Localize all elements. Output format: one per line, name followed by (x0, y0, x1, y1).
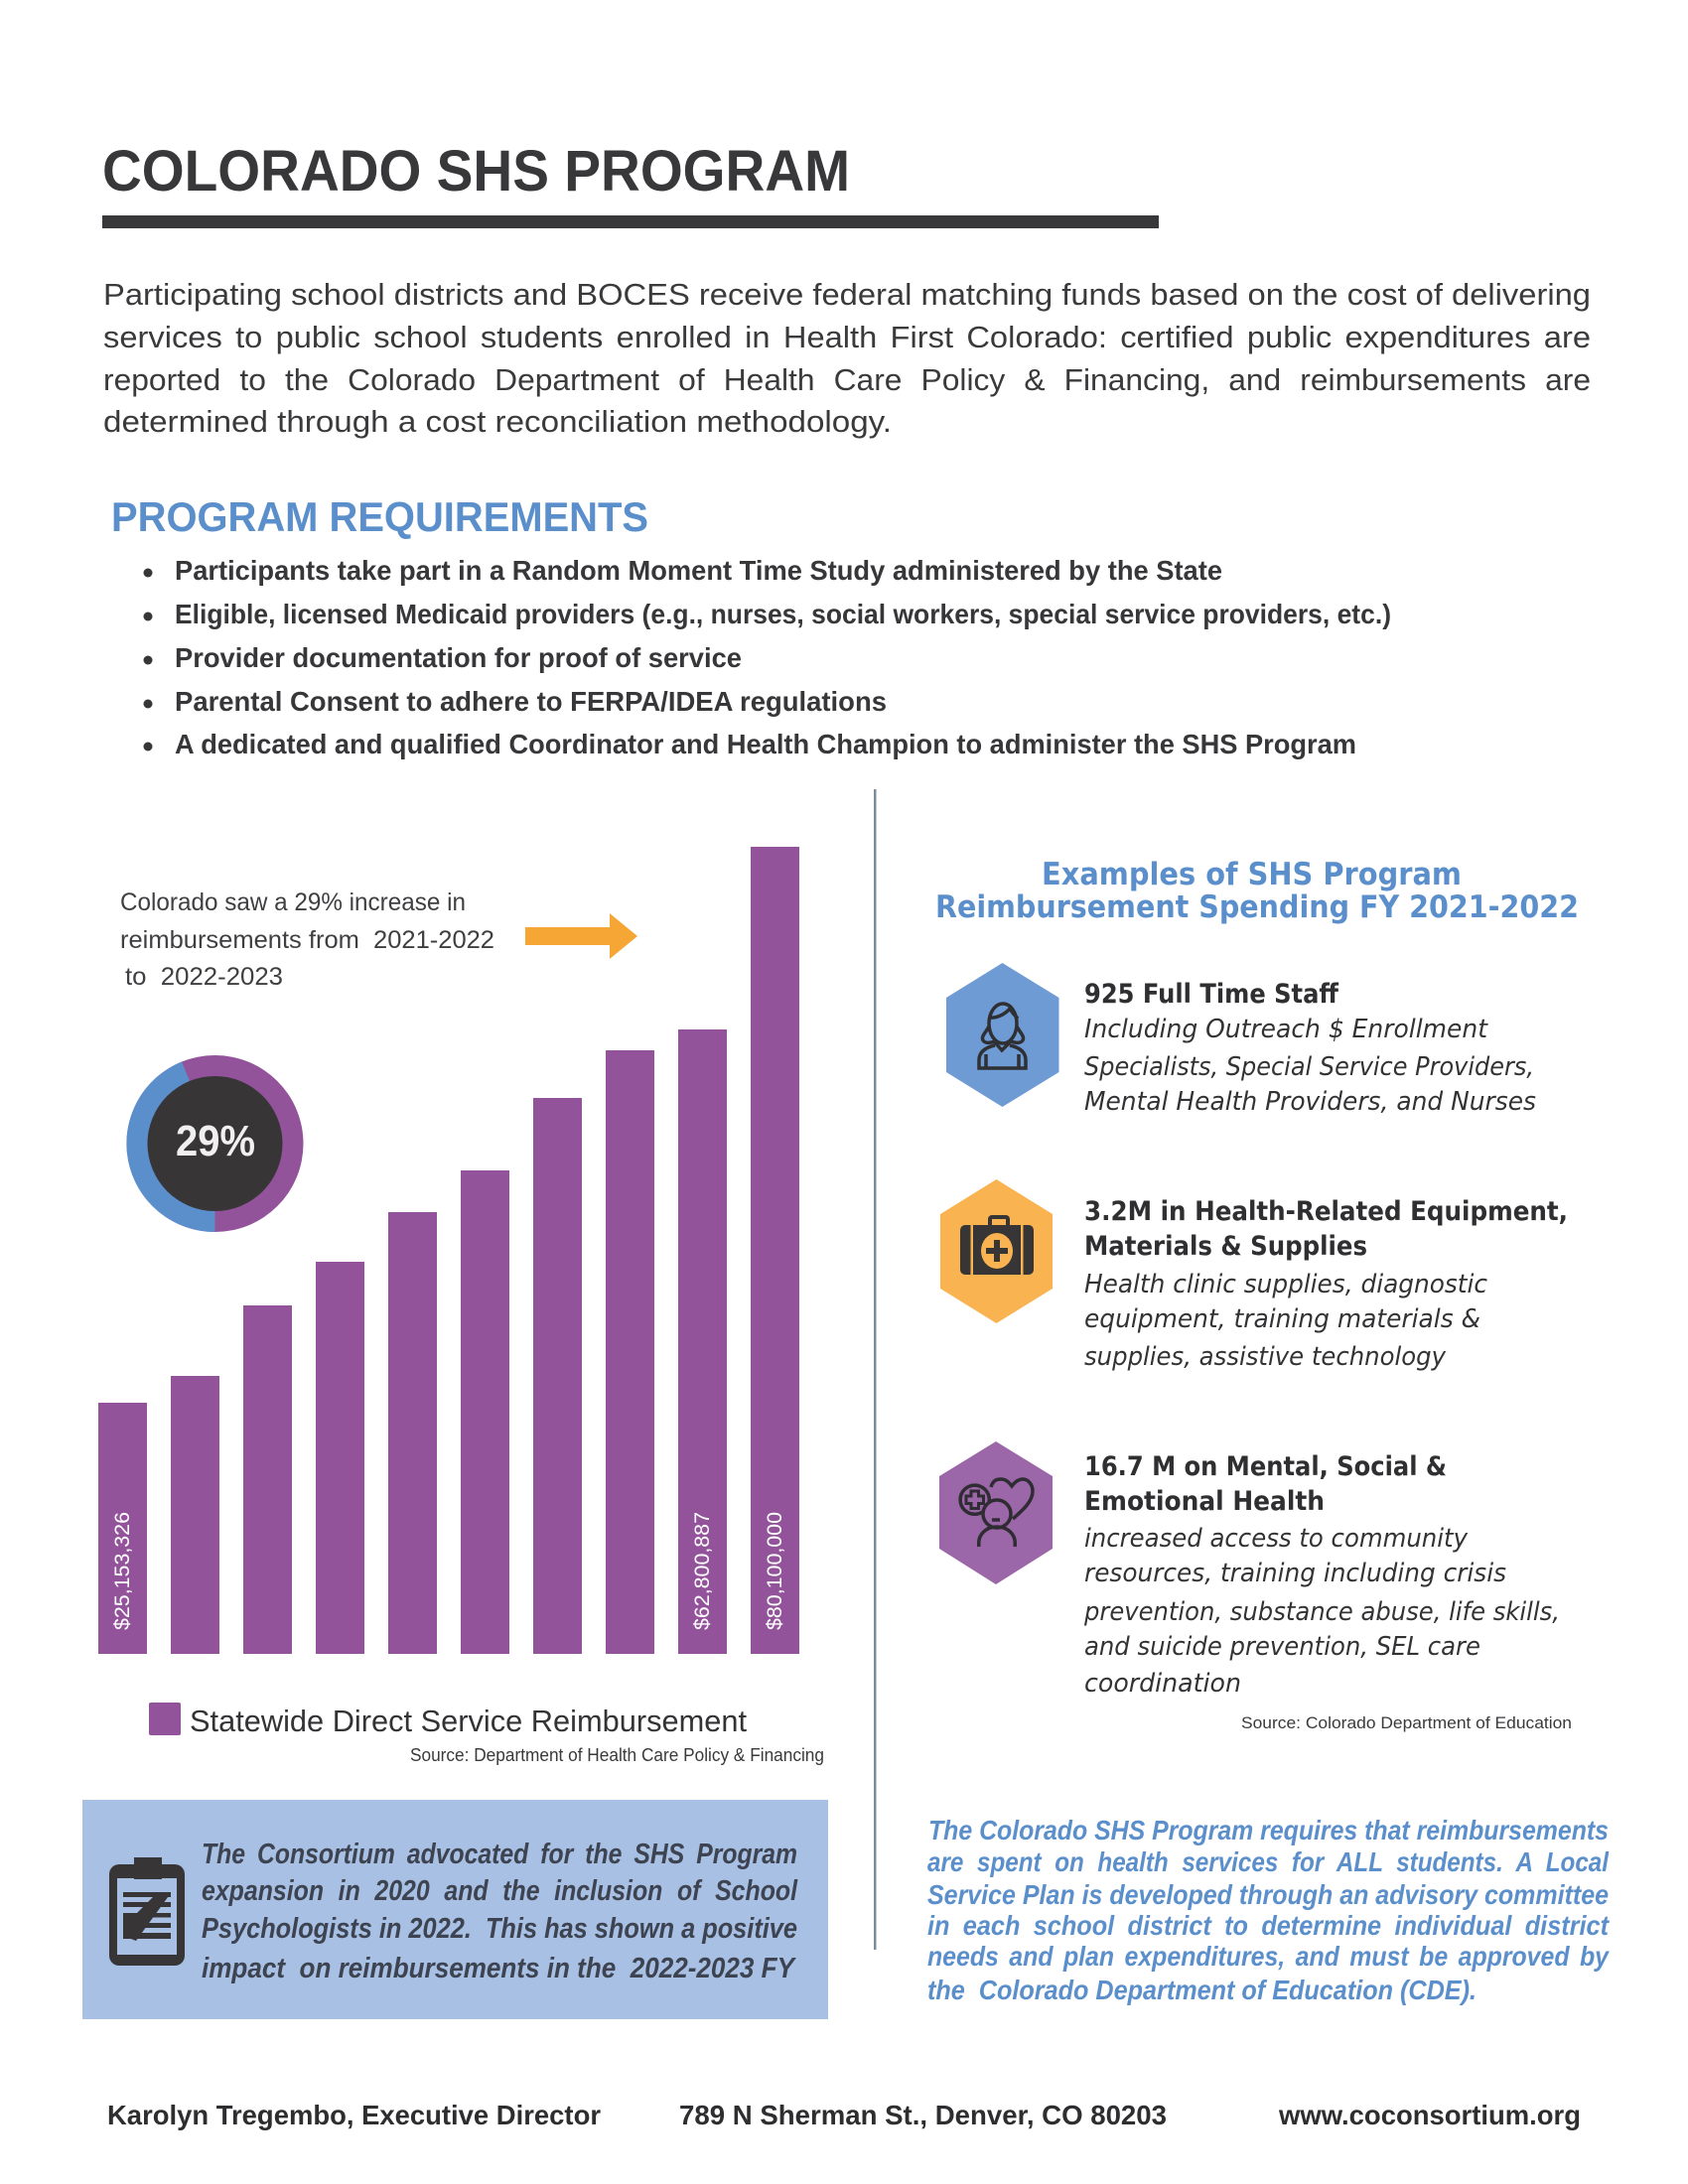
item: mental health text: Emotional Health (1084, 1486, 1325, 1517)
item: equipment text: equipment, training materials & (1084, 1304, 1480, 1334)
item: staff text (1084, 979, 1536, 1117)
item: staff text: Mental Health Providers, and Nurses (1084, 1087, 1536, 1117)
item: mental health text: increased access to community (1084, 1524, 1469, 1554)
local service plan note: The Colorado SHS Program requires that reimbursements (928, 1815, 1609, 1845)
advocacy text: Psychologists in 2022. This has shown a positive (202, 1913, 797, 1945)
advocacy text: impact on reimbursements in the 2022-2023 FY (202, 1953, 796, 1984)
donut chart: 29% (126, 1055, 304, 1232)
item: equipment text (1084, 1196, 1568, 1372)
heading: examples of spending: Reimbursement Spending FY 2021-2022 (935, 889, 1579, 925)
footer: www.coconsortium.org (1278, 2100, 1581, 2130)
bar value labels (111, 1512, 786, 1630)
spending source: Source: Colorado Department of Education (1241, 1713, 1572, 1732)
bar chart (98, 847, 799, 1654)
advocacy text: expansion in 2020 and the inclusion of School (202, 1875, 798, 1907)
local service plan note: needs and plan expenditures, and must be approved by (927, 1941, 1610, 1972)
item: mental health text (1083, 1451, 1560, 1699)
intro paragraph: Participating school districts and BOCES receive federal matching funds based on the cost of delivering (103, 277, 1591, 312)
item: equipment text: 3.2M in Health-Related Equipment, (1084, 1196, 1568, 1227)
callout: 29% increase text: to 2022-2023 (125, 963, 283, 991)
item: equipment text: Health clinic supplies, diagnostic (1084, 1270, 1487, 1299)
icon: mental health hexagon (939, 1441, 1053, 1584)
callout: 29% increase text: reimbursements from 2021-2022 (120, 926, 494, 954)
local service plan note: Service Plan is developed through an advisory committee (927, 1879, 1609, 1910)
donut chart: 29%: 29% (176, 1117, 255, 1165)
title: COLORADO SHS PROGRAM (102, 139, 850, 204)
requirements list (143, 555, 1391, 759)
requirements list: Provider documentation for proof of service (175, 642, 742, 673)
requirements list: A dedicated and qualified Coordinator and Health Champion to administer the SHS Program (175, 729, 1356, 759)
item: mental health text: 16.7 M on Mental, Social & (1084, 1451, 1447, 1482)
icon: staff hexagon (946, 963, 1058, 1107)
callout: 29% increase text: Colorado saw a 29% increase in (120, 888, 466, 916)
local service plan note: the Colorado Department of Education (CDE). (927, 1975, 1477, 2005)
arrow (525, 913, 637, 959)
intro paragraph: services to public school students enrolled in Health First Colorado: certified public expenditures are (103, 320, 1591, 354)
heading: program requirements: PROGRAM REQUIREMENTS (111, 493, 648, 540)
advocacy text: The Consortium advocated for the SHS Program (202, 1839, 797, 1870)
footer: Karolyn Tregembo, Executive Director (107, 2100, 601, 2130)
item: equipment text: Materials & Supplies (1084, 1231, 1367, 1262)
item: mental health text: prevention, substance abuse, life skills, (1083, 1597, 1560, 1627)
item: staff text: Including Outreach $ Enrollment (1084, 1015, 1488, 1044)
requirements list: Eligible, licensed Medicaid providers (e.g., nurses, social workers, special service providers, etc.) (175, 599, 1391, 629)
heading: examples of spending (935, 857, 1579, 925)
heading: examples of spending: Examples of SHS Program (1042, 857, 1462, 892)
title rule (102, 215, 1159, 228)
item: mental health text: resources, training including crisis (1084, 1559, 1506, 1588)
icon: clipboard (109, 1857, 185, 1966)
chart legend: Statewide Direct Service Reimbursement (190, 1704, 747, 1738)
item: staff text: Specialists, Special Service Providers, (1084, 1052, 1534, 1082)
footer: 789 N Sherman St., Denver, CO 80203 (679, 2100, 1167, 2130)
local service plan note: in each school district to determine individual district (927, 1910, 1611, 1941)
item: equipment text: supplies, assistive technology (1084, 1342, 1447, 1372)
bar value labels: $62,800,887 (691, 1512, 714, 1630)
advocacy text (202, 1839, 798, 1984)
item: staff text: 925 Full Time Staff (1084, 979, 1339, 1010)
intro paragraph: reported to the Colorado Department of Health Care Policy & Financing, and reimbursements are (103, 362, 1591, 397)
item: mental health text: and suicide prevention, SEL care (1084, 1632, 1480, 1662)
requirements list: Parental Consent to adhere to FERPA/IDEA regulations (175, 686, 887, 717)
intro paragraph: determined through a cost reconciliation methodology. (103, 404, 892, 439)
chart source: Source: Department of Health Care Policy & Financing (410, 1745, 824, 1765)
requirements list: Participants take part in a Random Moment Time Study administered by the State (175, 555, 1222, 586)
icon: medical kit hexagon (940, 1179, 1053, 1323)
callout: 29% increase text (120, 888, 494, 991)
item: mental health text: coordination (1084, 1669, 1241, 1699)
local service plan note (927, 1815, 1611, 2005)
bar value labels: $80,100,000 (764, 1512, 786, 1630)
bar value labels: $25,153,326 (111, 1512, 134, 1630)
footer (107, 2100, 1581, 2130)
intro paragraph (103, 277, 1591, 439)
panel: consortium advocacy (82, 1800, 828, 2019)
